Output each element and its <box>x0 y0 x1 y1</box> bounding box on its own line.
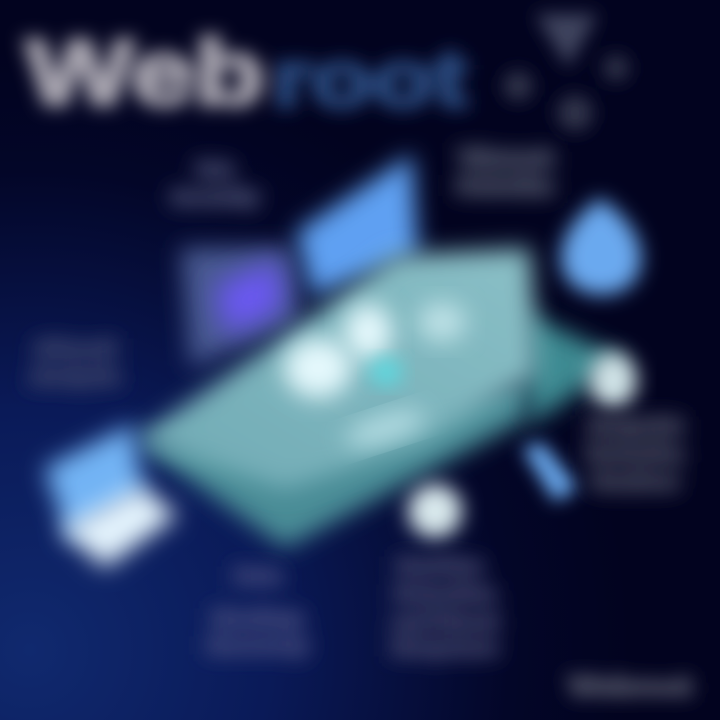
platform right wing <box>520 310 625 425</box>
label: brand footer: Webroot <box>569 671 691 701</box>
label: bottom center-right: and Threat <box>392 612 498 632</box>
icon: blue connector <box>522 442 578 502</box>
label: bottom center-left: Data <box>236 566 282 586</box>
bright tiles <box>284 338 352 398</box>
label: top left: Security <box>171 187 260 209</box>
label: bottom center-right: Response <box>392 638 498 658</box>
label: bottom center-left: Recovery <box>208 636 308 656</box>
panel: blue screen <box>296 154 418 296</box>
icon: water drop <box>561 198 641 295</box>
label: bottom center-right <box>392 556 498 658</box>
label: left: Analysis <box>31 367 119 387</box>
label: bottom center-left: Backup <box>213 608 303 630</box>
label: top right: Threat <box>460 148 550 170</box>
title: Web <box>26 22 264 124</box>
label: right <box>588 416 682 492</box>
icon: network dots <box>503 14 629 131</box>
label: right: Endpoint <box>590 416 680 436</box>
icon: bottom white node <box>408 484 462 538</box>
icon: right white node <box>589 352 637 408</box>
title: root <box>272 34 467 123</box>
label: right: Protection <box>588 444 682 464</box>
label: top right: Protection <box>458 176 552 198</box>
icon: bottom left laptop <box>44 424 178 568</box>
platform top face <box>135 248 538 490</box>
label: right: Services <box>592 472 678 492</box>
label: left <box>31 339 119 387</box>
label: bottom center-right: Detection <box>395 584 495 604</box>
panel: main platform <box>135 248 625 548</box>
panel: purple screen <box>180 246 300 368</box>
label: top left <box>171 160 260 209</box>
label: bottom center-right: Real-time <box>398 556 482 576</box>
label: top left: Web <box>196 160 234 180</box>
platform lower face <box>135 380 530 548</box>
label: top right <box>458 148 552 198</box>
title <box>26 22 467 124</box>
label: left: Cloud <box>36 339 114 359</box>
label: bottom center-left <box>208 566 308 656</box>
